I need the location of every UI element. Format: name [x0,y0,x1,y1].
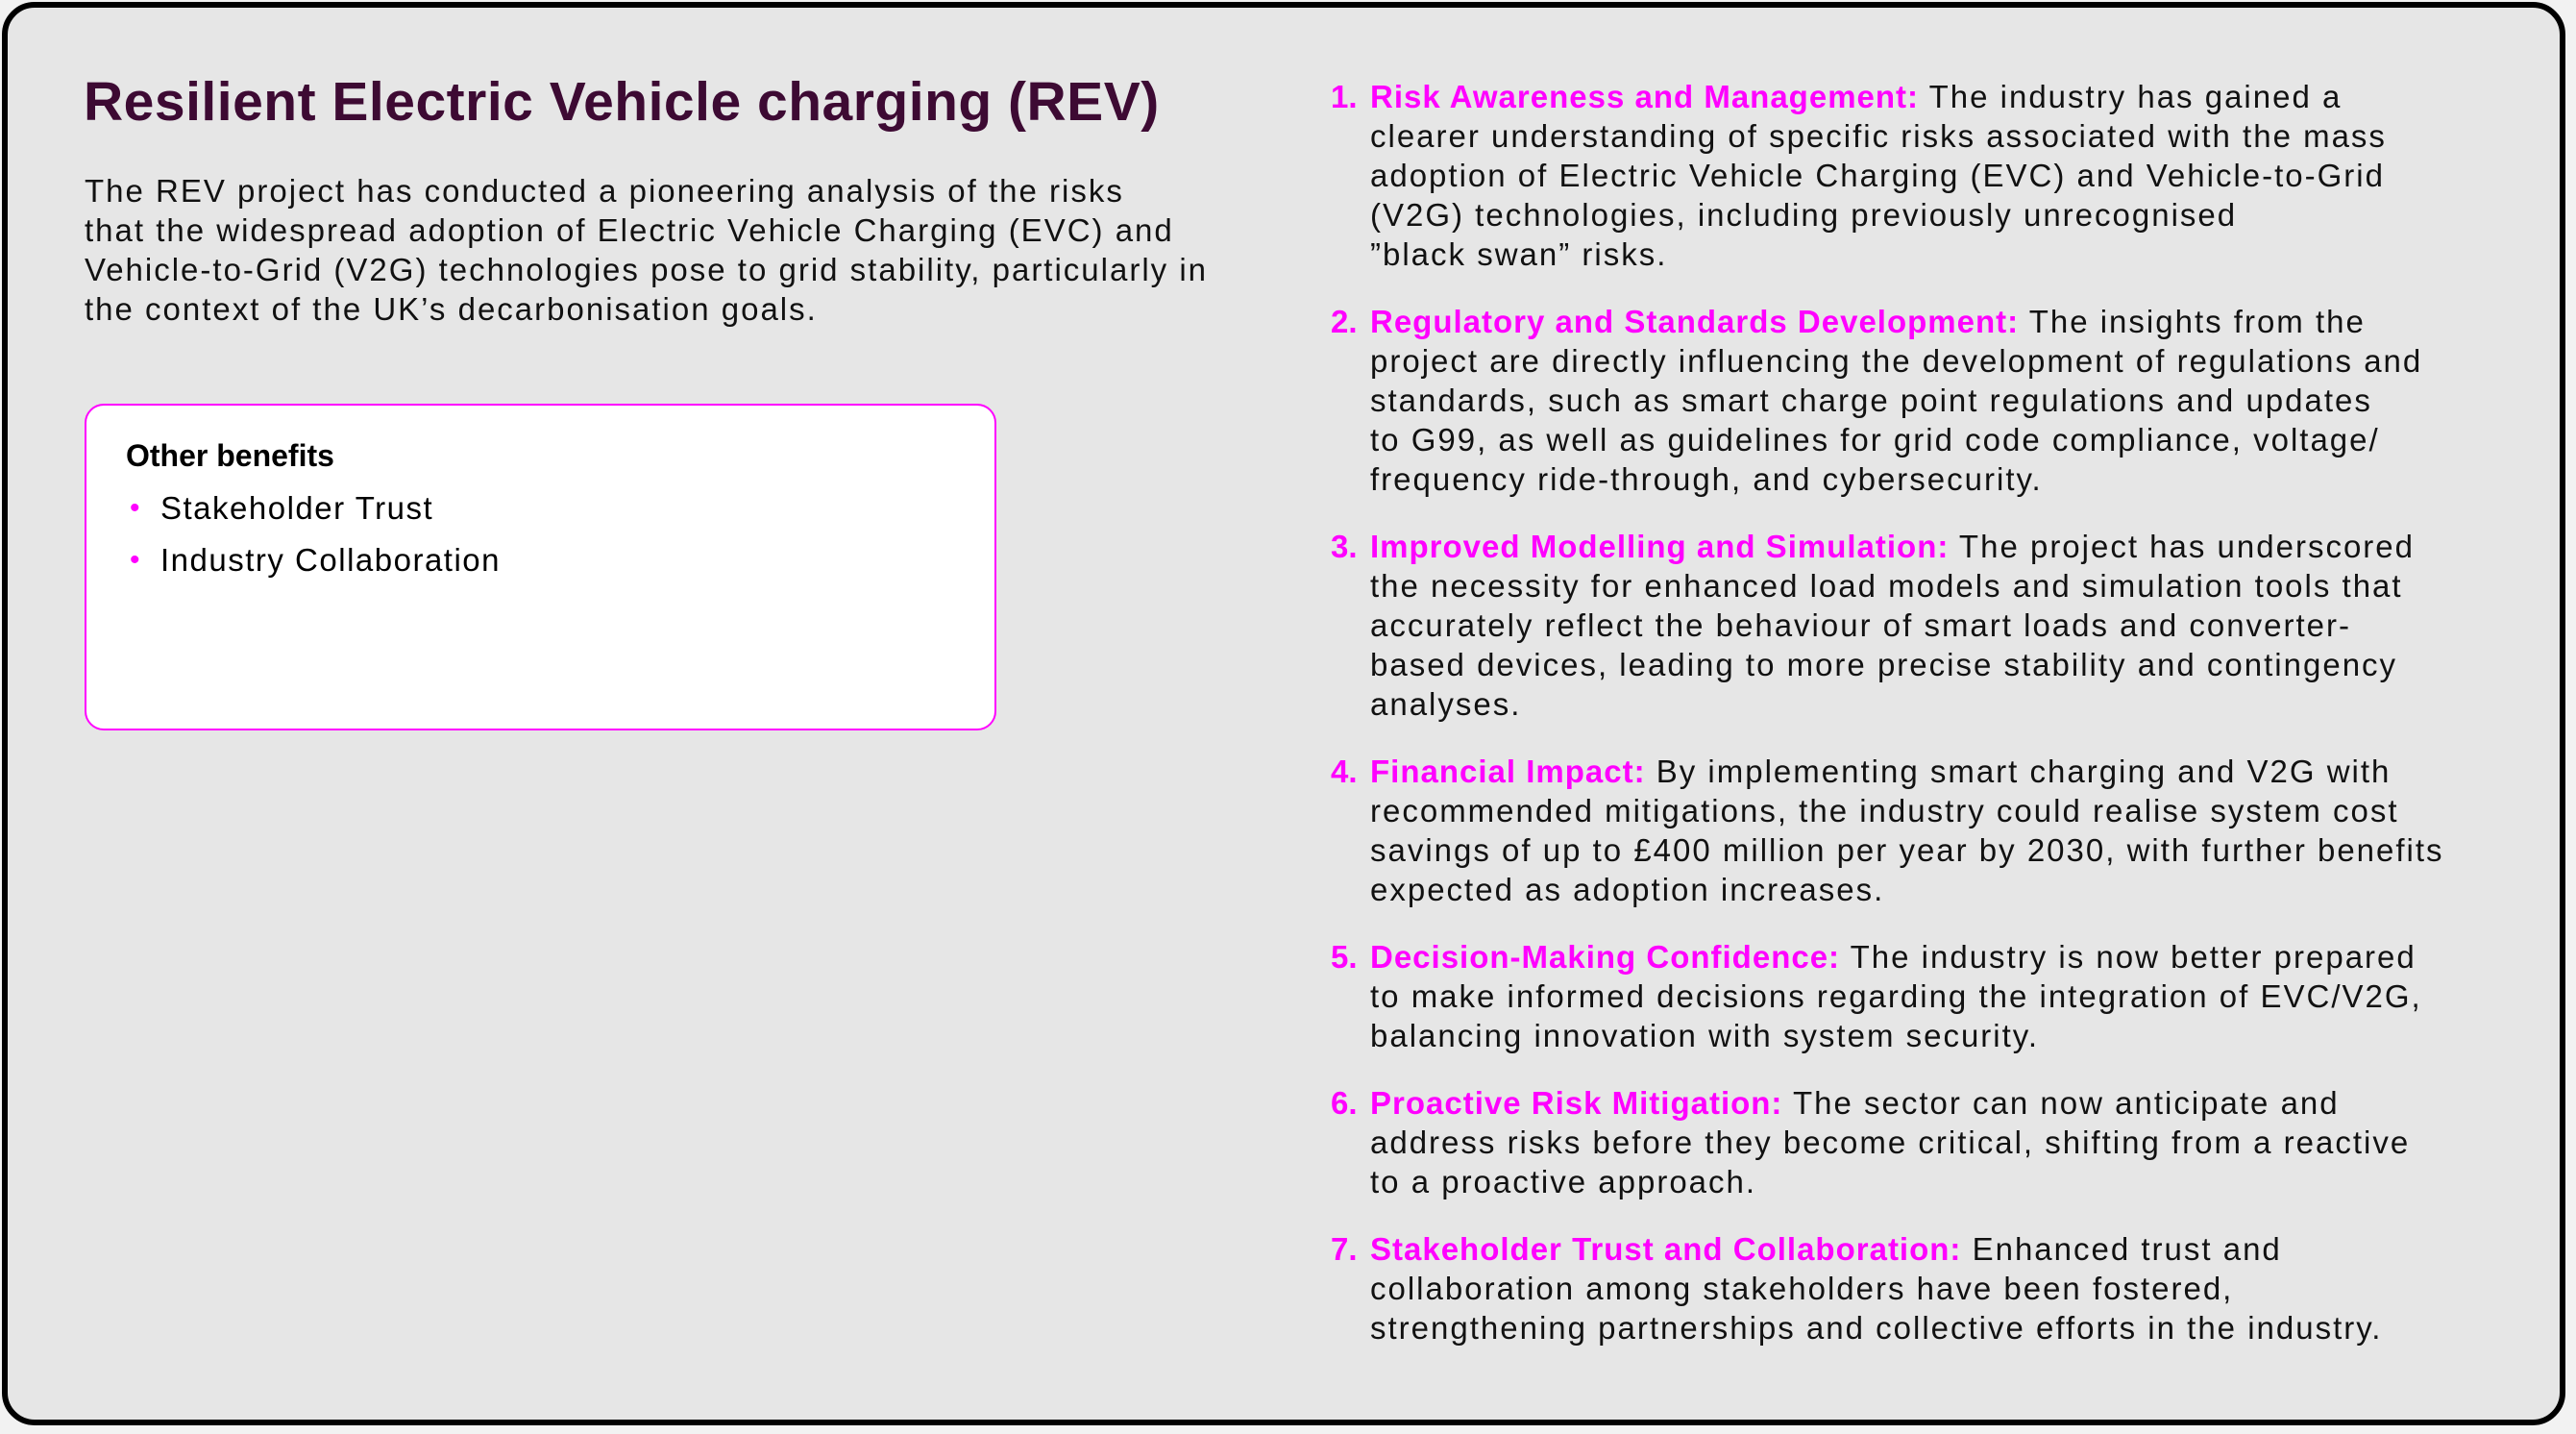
item 7: 7. [1331,1231,1358,1267]
item 2: Regulatory and Standards Development: The insights from the [1370,304,2366,339]
intro paragraph: The REV project has conducted a pioneering analysis of the risks [85,173,1124,209]
item 2: 2. [1331,304,1358,339]
intro paragraph: Vehicle-to-Grid (V2G) technologies pose to grid stability, particularly in [85,252,1208,287]
item 7: collaboration among stakeholders have been fostered, [1370,1271,2233,1306]
item 6: Proactive Risk Mitigation: The sector can now anticipate and [1370,1085,2340,1121]
item 4: 4. [1331,754,1358,789]
item 5: to make informed decisions regarding the integration of EVC/V2G, [1370,978,2422,1014]
numbered list of benefits [1331,79,2444,1346]
item 3: the necessity for enhanced load models and simulation tools that [1370,568,2403,604]
intro paragraph: that the widespread adoption of Electric Vehicle Charging (EVC) and [85,212,1174,248]
item 1: adoption of Electric Vehicle Charging (EVC) and Vehicle-to-Grid [1370,158,2385,193]
item 4: savings of up to £400 million per year by 2030, with further benefits [1370,832,2444,868]
item 2: frequency ride-through, and cybersecurity. [1370,461,2043,497]
item 5: balancing innovation with system security. [1370,1018,2039,1053]
item 1: Risk Awareness and Management: The industry has gained a [1370,79,2342,114]
item 1 [1331,79,2387,272]
item 3: 3. [1331,529,1358,564]
item 6: 6. [1331,1085,1358,1121]
item 4: recommended mitigations, the industry could realise system cost [1370,793,2399,828]
item 7: Stakeholder Trust and Collaboration: Enhanced trust and [1370,1231,2282,1267]
panel: other benefits [85,404,996,730]
item 6: to a proactive approach. [1370,1164,1756,1199]
heading: other benefits: Other benefits [126,438,334,473]
item 3: based devices, leading to more precise stability and contingency [1370,647,2397,682]
bullet: stakeholder trust: Stakeholder Trust [160,490,433,526]
item 5 [1331,939,2422,1053]
item 3: analyses. [1370,686,1521,722]
item 1: (V2G) technologies, including previously unrecognised [1370,197,2237,233]
intro paragraph [85,173,1208,327]
item 1: clearer understanding of specific risks associated with the mass [1370,118,2387,154]
item 4 [1331,754,2444,907]
item 7: strengthening partnerships and collective efforts in the industry. [1370,1310,2382,1346]
item 2: project are directly influencing the development of regulations and [1370,343,2422,379]
item 2: standards, such as smart charge point regulations and updates [1370,383,2372,418]
item 4: expected as adoption increases. [1370,872,1884,907]
item 7 [1331,1231,2382,1346]
item 4: Financial Impact: By implementing smart charging and V2G with [1370,754,2391,789]
item 6 [1331,1085,2410,1199]
item 1: ”black swan” risks. [1370,236,1667,272]
panel: other benefits: • [130,492,141,524]
item 1: 1. [1331,79,1358,114]
panel: other benefits: • [130,544,141,576]
item 3: accurately reflect the behaviour of smart loads and converter- [1370,607,2351,643]
item 3 [1331,529,2415,722]
item 5: Decision-Making Confidence: The industry is now better prepared [1370,939,2417,975]
title: Resilient Electric Vehicle charging (REV) [84,71,1160,133]
intro paragraph: the context of the UK’s decarbonisation goals. [85,291,818,327]
item 6: address risks before they become critical, shifting from a reactive [1370,1125,2410,1160]
item 2: to G99, as well as guidelines for grid code compliance, voltage/ [1370,422,2380,457]
item 2 [1331,304,2422,497]
item 3: Improved Modelling and Simulation: The project has underscored [1370,529,2415,564]
bullet: industry collaboration: Industry Collaboration [160,542,501,578]
item 5: 5. [1331,939,1358,975]
